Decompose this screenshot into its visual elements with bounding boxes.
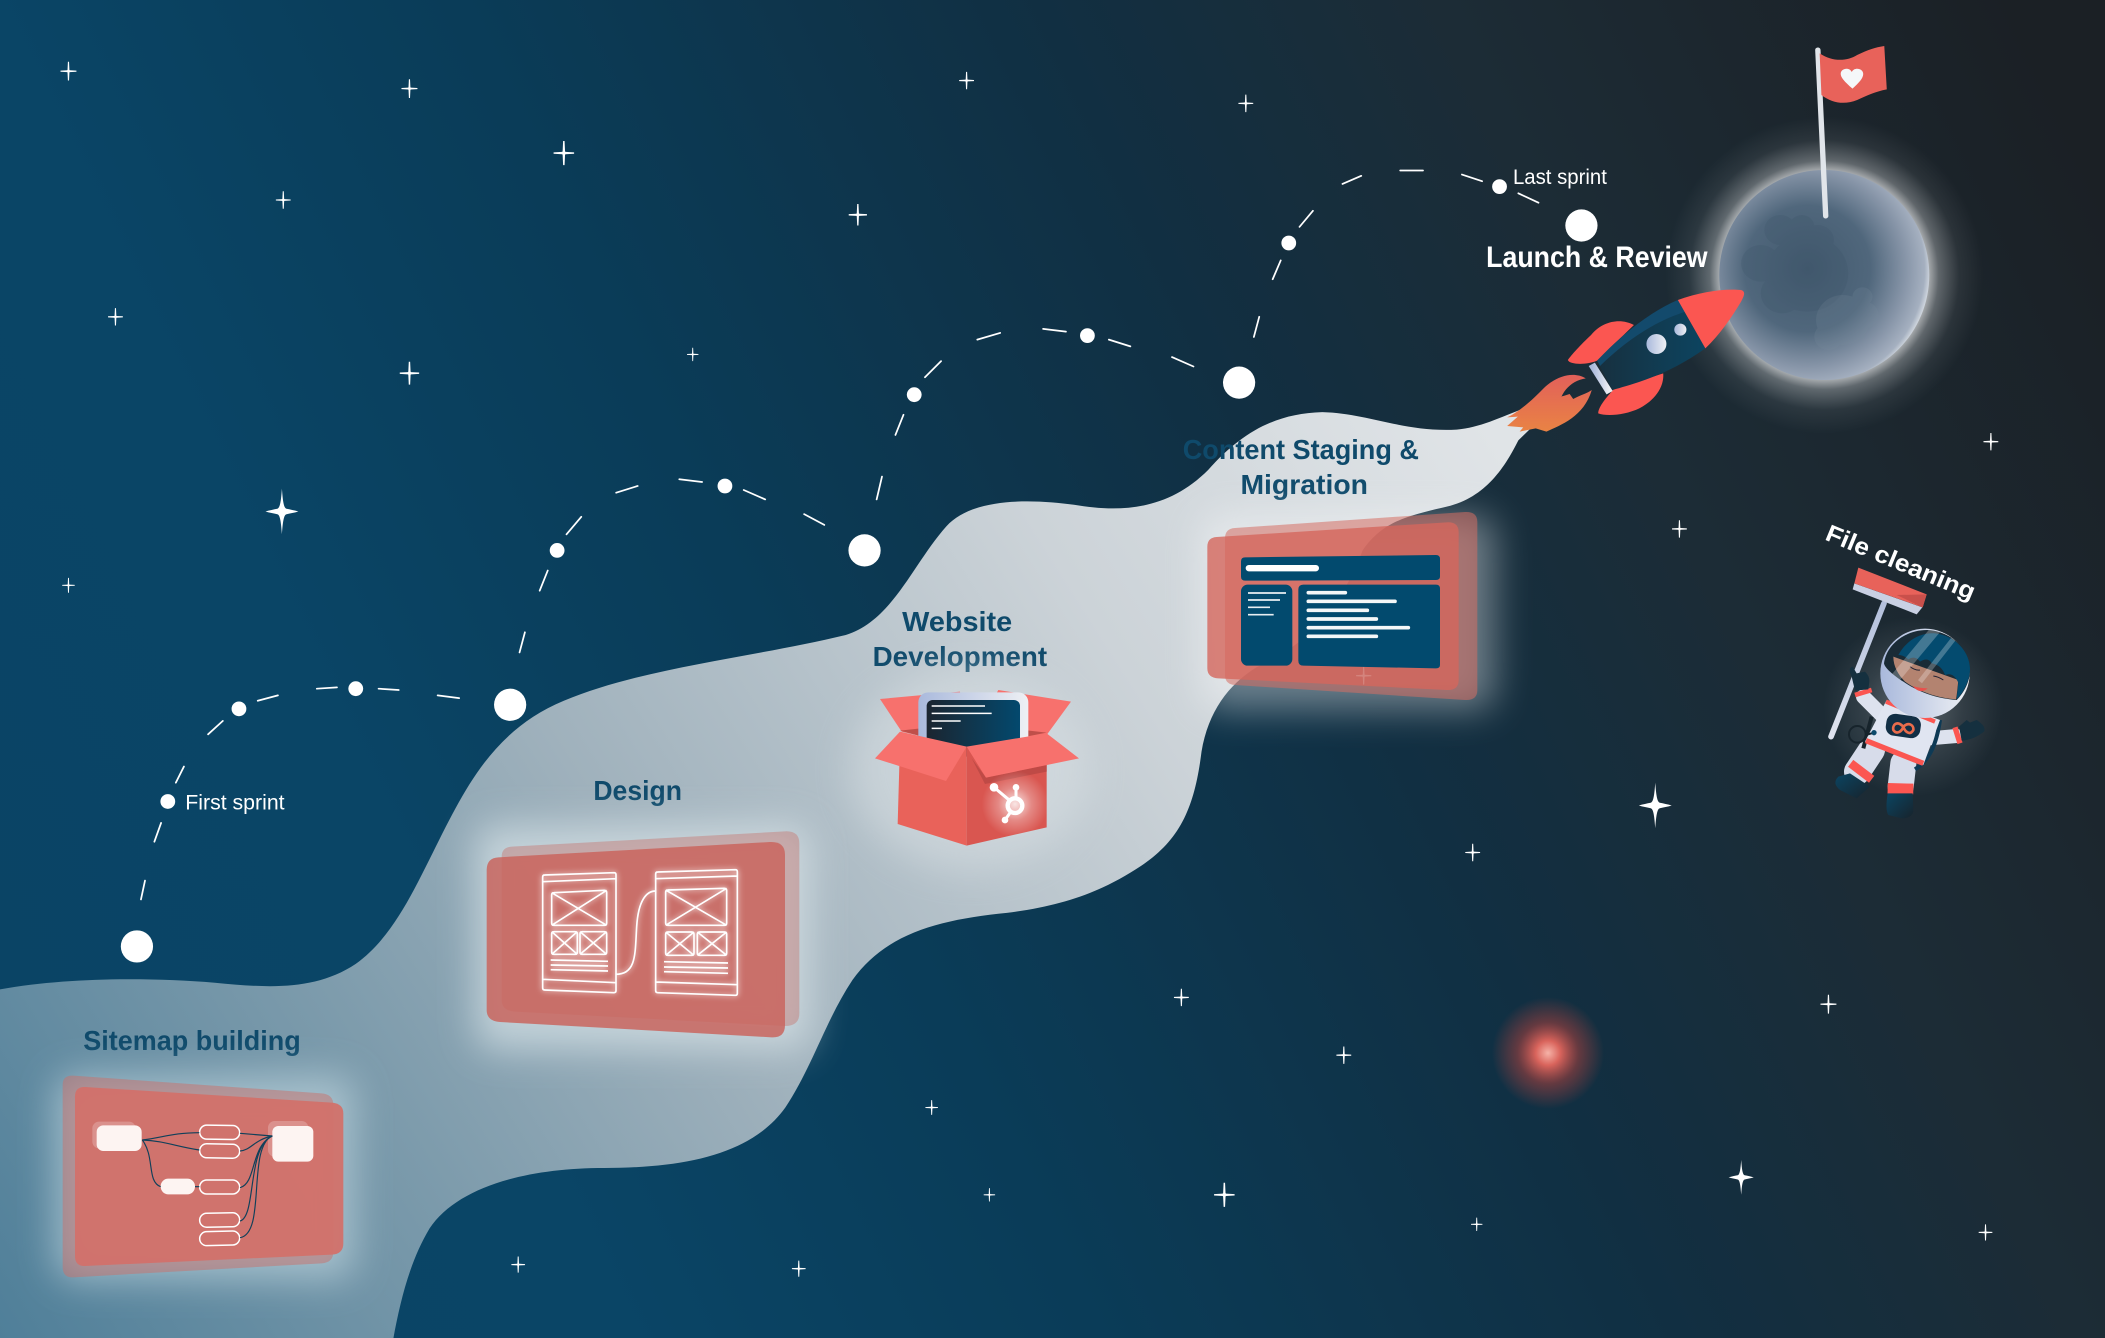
red distant planet: [1492, 997, 1604, 1109]
flag: [1820, 46, 1887, 103]
card glow: [55, 1075, 355, 1280]
icon: open box with tablet: [875, 690, 1079, 846]
astronaut glow: [1823, 617, 2003, 797]
card glow: [1200, 515, 1495, 710]
heading: website development: Development: [873, 640, 1048, 672]
heading: content staging and migration: [1183, 433, 1419, 500]
moon with flag and rocket: [1507, 46, 1983, 434]
content card: [1207, 512, 1477, 700]
panel: website development: [850, 605, 1090, 870]
heading: content staging and migration: Migration: [1240, 468, 1368, 500]
heading: launch and review: Launch & Review: [1486, 241, 1709, 274]
box glow: [850, 670, 1090, 870]
heading: content staging and migration: Content Staging &: [1183, 433, 1419, 465]
heading: file cleaning: File cleaning: [1822, 520, 1979, 606]
broom: [1831, 568, 1927, 737]
astronaut figure: [1835, 628, 1985, 818]
star behind card: [1356, 667, 1371, 685]
icon: hubspot logo: [990, 783, 1022, 823]
moon: [1719, 170, 1929, 380]
card glow: [475, 825, 810, 1050]
label: first sprint: First sprint: [185, 791, 285, 815]
design card: [487, 831, 799, 1037]
moon glow: [1665, 116, 1983, 434]
flag pole: [1818, 50, 1826, 216]
label: last sprint: Last sprint: [1513, 165, 1607, 189]
heading: website development: Website: [902, 605, 1012, 637]
sprint path: [121, 170, 1598, 963]
light stream: [0, 396, 1564, 1338]
panel: design: [475, 774, 810, 1050]
sitemap card: [63, 1076, 343, 1277]
astronaut: [1826, 524, 1988, 818]
heading: design: Design: [593, 774, 682, 806]
icon: heart: [1841, 69, 1863, 89]
panel: content staging and migration: [1183, 433, 1495, 710]
heading: website development: [873, 605, 1048, 672]
rocket: [1507, 290, 1744, 432]
panel: sitemap building: [55, 1024, 355, 1280]
heading: sitemap building: Sitemap building: [83, 1024, 301, 1056]
